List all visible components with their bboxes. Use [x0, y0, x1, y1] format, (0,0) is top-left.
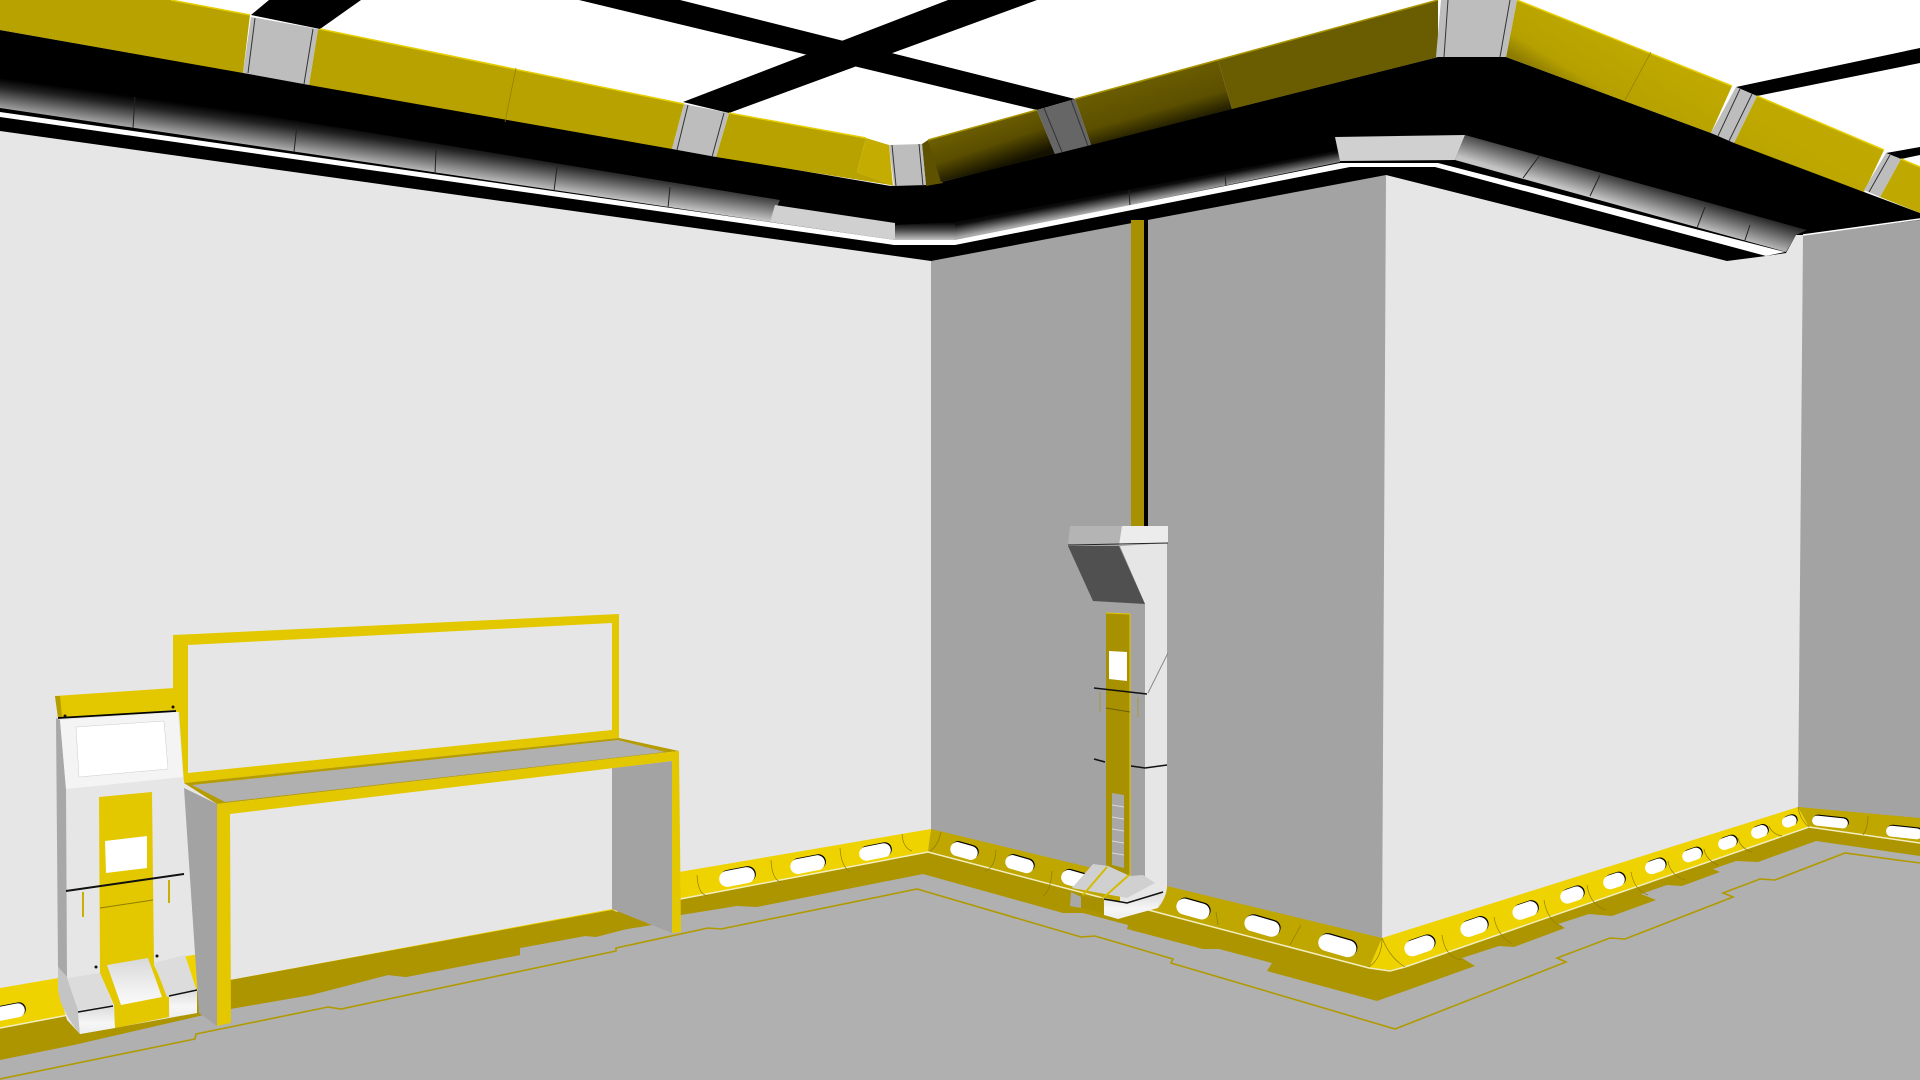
kiosk: right foot	[154, 955, 197, 997]
duct: corner piece	[857, 138, 893, 186]
floor	[0, 780, 1920, 1080]
bench: upper frame	[173, 614, 619, 783]
centre kiosk: body	[1120, 543, 1167, 918]
kiosk: lower left side	[58, 967, 80, 1034]
bench with upper frame	[173, 614, 681, 1026]
duct: left run	[0, 0, 891, 185]
floor guide line	[0, 853, 1920, 1079]
baseboard: right bright	[1369, 807, 1809, 970]
kiosk: label panel	[105, 836, 147, 873]
kiosk: base seams	[78, 990, 197, 1012]
centre kiosk: top box left	[1068, 526, 1122, 545]
yellow upper duct	[0, 0, 1920, 213]
duct: shaded run middle	[1075, 60, 1232, 145]
kiosk: header block	[55, 688, 175, 718]
centre kiosk: diagonal	[1148, 653, 1168, 693]
ceiling: white panels	[0, 0, 1920, 320]
kiosk: tray	[107, 958, 162, 1005]
centre kiosk: hood underside	[1068, 546, 1145, 604]
kiosk left	[55, 688, 197, 1034]
ceiling grid beams	[251, 0, 1920, 159]
duct: shaded run right	[1218, 0, 1438, 109]
wall: far right grey	[1798, 220, 1920, 830]
vertical pipe	[1131, 219, 1148, 528]
strap lines	[248, 0, 1890, 192]
white light strip	[0, 112, 1785, 256]
far right wall top highlight	[1803, 219, 1920, 235]
kiosk centre	[1068, 526, 1168, 919]
centre kiosk: front left grey	[1070, 892, 1081, 908]
bench: floor shadow under table	[230, 910, 652, 1009]
black ceiling band	[0, 30, 1920, 300]
duct: right bright edge	[1517, 0, 1920, 167]
lower duct: left light section	[770, 205, 895, 240]
kiosk: rivets	[64, 706, 174, 968]
kiosk: screen face	[60, 712, 183, 789]
lower duct: left gradient run	[0, 72, 780, 222]
duct: seams	[505, 52, 1651, 122]
baseboard vent slots	[0, 814, 1920, 1022]
bench: front frame	[217, 751, 681, 1026]
kiosk: body	[56, 712, 197, 1034]
centre kiosk: top box right	[1119, 526, 1168, 545]
centre kiosk: front gold	[1081, 897, 1104, 913]
kiosk: yellow column	[99, 792, 169, 1028]
centre kiosk: slots	[1100, 692, 1138, 717]
lower duct: middle gradient run	[955, 150, 1340, 241]
centre kiosk: base seam	[1104, 892, 1163, 903]
duct: shaded run left	[928, 110, 1055, 182]
lower duct: right gradient run	[1455, 135, 1807, 252]
baseboard: segment seams	[697, 807, 1868, 967]
duct: shaded bright edge	[928, 0, 1438, 140]
bench: back panel	[230, 761, 672, 980]
bench: table edge	[184, 738, 679, 804]
kiosk: left foot	[67, 973, 113, 1010]
pipe gold	[1131, 220, 1144, 528]
wall: right light	[1382, 175, 1803, 945]
kiosk: front left base	[78, 1007, 115, 1034]
bench: table top	[192, 740, 665, 802]
baseboard: left bright	[0, 829, 931, 1028]
centre kiosk: foot top	[1072, 864, 1155, 898]
centre kiosk: foot stripes	[1083, 867, 1129, 898]
centre kiosk: column edge	[1106, 613, 1130, 876]
wall: left light	[0, 131, 931, 1000]
centre kiosk: top seam	[1068, 543, 1168, 545]
baseboard: bottom highlight	[0, 827, 1920, 1028]
baseboard: far right darker	[1798, 807, 1920, 843]
centre kiosk: column seam	[1106, 708, 1130, 712]
centre kiosk: ladder panel	[1112, 793, 1124, 868]
kiosk: slots	[83, 880, 169, 917]
centre kiosk: gold column	[1106, 613, 1130, 876]
baseboard: centre darker	[928, 829, 1382, 968]
wall: centre grey	[931, 175, 1386, 945]
bench: left side	[184, 788, 217, 1026]
kiosk: header side	[55, 696, 62, 718]
kiosk: header shadow line	[58, 711, 176, 718]
lower duct: corner	[895, 222, 955, 241]
duct: left bright edge	[171, 0, 866, 138]
kiosk: screen	[76, 721, 168, 777]
centre kiosk: front right base	[1104, 893, 1163, 919]
lower duct: segment lines	[133, 97, 1750, 243]
duct straps	[243, 0, 1901, 197]
duct: right run	[1506, 0, 1920, 213]
kiosk: left side	[56, 718, 67, 977]
floor shadow band	[0, 827, 1920, 1060]
kiosk: front right base	[169, 990, 197, 1017]
centre kiosk: seams	[1094, 688, 1167, 768]
kiosk: column seam	[100, 900, 153, 908]
centre kiosk: ladder rungs	[1112, 805, 1124, 855]
centre kiosk: label panel	[1109, 651, 1127, 681]
bench: right inner side	[612, 761, 672, 933]
kiosk: seam	[66, 874, 184, 891]
lower duct: top light piece	[1335, 135, 1465, 161]
baseboard	[0, 807, 1920, 1028]
duct: corner wedge right	[922, 140, 943, 186]
pipe shadow	[1144, 219, 1148, 528]
